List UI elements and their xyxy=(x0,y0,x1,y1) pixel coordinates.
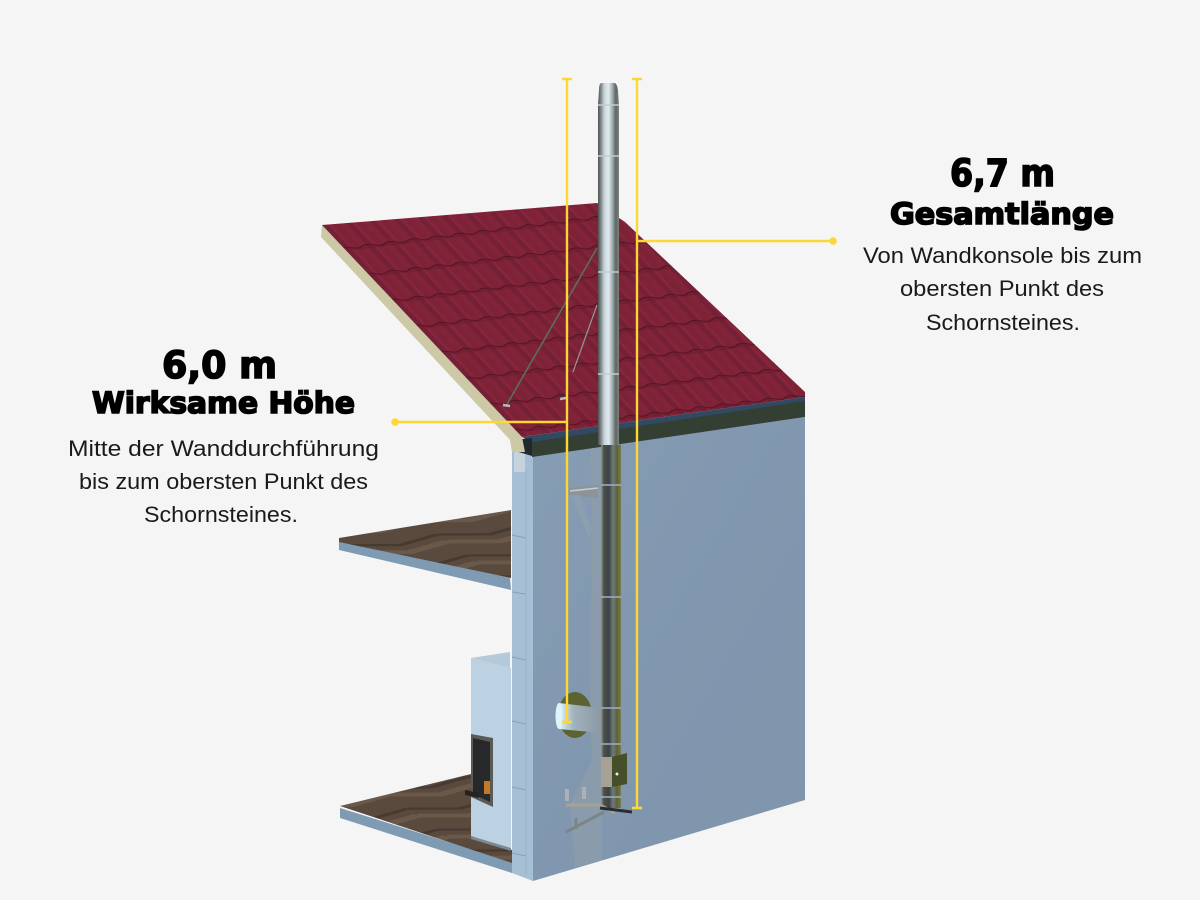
roof side board xyxy=(321,225,525,452)
dimension line: Gesamtlänge xyxy=(632,79,837,808)
upper floor slab xyxy=(339,510,511,590)
description: Schornsteines. xyxy=(926,310,1080,335)
description xyxy=(68,436,379,527)
wall side joints xyxy=(512,470,526,875)
description: Schornsteines. xyxy=(144,502,298,527)
stove door xyxy=(465,734,493,807)
wall vent xyxy=(514,452,525,472)
left callout xyxy=(68,344,379,527)
lower floor slab xyxy=(340,774,512,873)
description: Mitte der Wanddurchführung xyxy=(68,436,379,461)
fascia xyxy=(532,400,805,457)
pipe console box xyxy=(601,753,627,787)
pipe shadow on wall xyxy=(570,446,602,868)
roof stays xyxy=(503,248,597,406)
right callout xyxy=(863,152,1142,335)
label Wirksame Höhe: Wirksame Höhe xyxy=(92,386,355,420)
wall front face xyxy=(533,417,805,881)
chimney pipe xyxy=(598,83,621,808)
description xyxy=(863,243,1142,335)
pipe lower section xyxy=(601,445,621,808)
description: Von Wandkonsole bis zum xyxy=(863,243,1142,268)
description: obersten Punkt des xyxy=(900,276,1104,301)
wall side face xyxy=(512,450,533,881)
pipe upper section xyxy=(598,83,619,445)
value 6,7 m: 6,7 m xyxy=(950,152,1055,195)
wall bracket xyxy=(569,485,598,540)
dimension line: Wirksame Höhe xyxy=(391,79,572,722)
label Gesamtlänge: Gesamtlänge xyxy=(890,197,1114,231)
roof tiles xyxy=(322,203,805,437)
stove xyxy=(465,652,511,851)
description: bis zum obersten Punkt des xyxy=(79,469,368,494)
wall sleeve xyxy=(556,692,601,738)
value 6,0 m: 6,0 m xyxy=(162,344,277,387)
wall console xyxy=(566,787,632,832)
pipe bands xyxy=(598,105,621,797)
house cross-section illustration xyxy=(321,83,805,881)
